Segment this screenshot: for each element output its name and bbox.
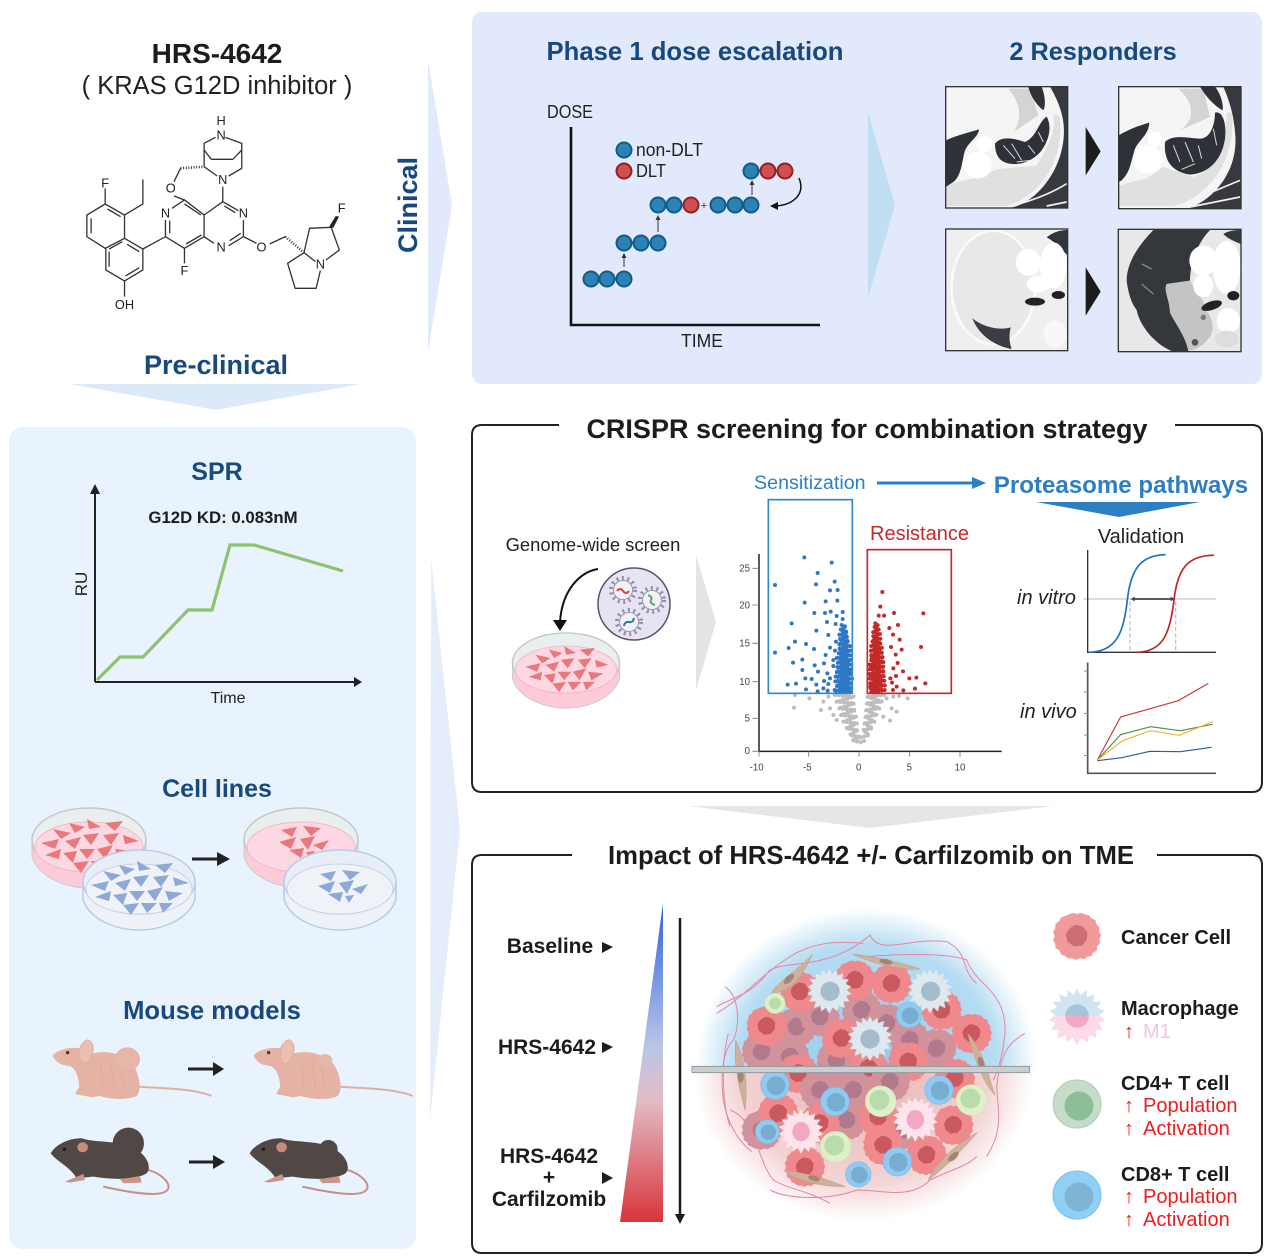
legend: CD4+ T cell: CD4+ T cell — [1121, 1073, 1229, 1095]
arrow: to proteasome — [877, 477, 986, 489]
marker: baseline — [602, 942, 613, 953]
volcano plot — [739, 500, 1002, 774]
dose escalation chart — [547, 102, 820, 351]
heading: Phase 1 dose escalation: Phase 1 dose escalation — [547, 38, 843, 66]
marker: HRS-4642 — [602, 1042, 613, 1053]
chemical structure: N — [218, 172, 227, 187]
chemical structure: OH — [115, 297, 134, 312]
volcano plot: 0 — [856, 763, 861, 774]
dose escalation chart: DOSE — [547, 102, 593, 122]
gradient wedge — [620, 903, 663, 1222]
volcano plot: 5 — [907, 763, 912, 774]
text: Sensitization: Sensitization — [754, 472, 866, 494]
chemical structure: N — [217, 127, 226, 142]
chemical structure: F — [181, 263, 188, 278]
subtitle: ( KRAS G12D inhibitor ) — [82, 72, 352, 100]
chemical structure: O — [256, 240, 266, 255]
volcano plot: 20 — [739, 600, 750, 611]
arrow: grey chevron — [696, 555, 716, 690]
volcano plot: 10 — [955, 763, 965, 774]
legend: macrophage — [1049, 988, 1239, 1045]
mice: nude, with tumour shrink — [53, 1039, 413, 1099]
SPR chart: Time — [211, 690, 246, 707]
text: Proteasome pathways: Proteasome pathways — [994, 472, 1248, 499]
tumour microenvironment illustration — [692, 908, 1037, 1222]
arrow: CT row 1 — [1086, 127, 1101, 175]
arrow: cell lines — [192, 852, 230, 866]
label: HRS-4642 + Carfilzomib: + — [543, 1166, 555, 1189]
heading: Clinical: Clinical — [393, 157, 423, 253]
label: Baseline: Baseline — [507, 935, 593, 958]
petri dishes: after treatment — [244, 808, 396, 930]
dose escalation chart: non-DLT — [636, 140, 703, 160]
arrow: clinical inner chevron — [868, 112, 895, 298]
label: HRS-4642: HRS-4642 — [498, 1036, 596, 1059]
legend: CD4+ T cell: Activation — [1143, 1118, 1230, 1140]
legend: CD4+ T cell: Population — [1143, 1095, 1238, 1117]
legend: CD4+ T cell: ↑ — [1124, 1118, 1134, 1140]
arrow: CT row 2 — [1086, 267, 1101, 316]
legend: CD8+ T cell: Population — [1143, 1186, 1238, 1208]
arrow: pre-clinical chevron — [70, 384, 361, 410]
arrow: black mice — [189, 1155, 225, 1169]
chemical structure: N — [316, 256, 325, 271]
volcano plot: 25 — [739, 564, 750, 575]
chemical structure: N — [239, 206, 248, 221]
marker: combination — [602, 1172, 613, 1184]
panel: pre-clinical background — [9, 427, 416, 1249]
CT scans row 2 — [946, 229, 1241, 352]
dose escalation chart: DLT — [636, 161, 666, 181]
SPR chart: G12D KD: 0.083nM — [148, 508, 298, 527]
petri dishes: before treatment — [32, 808, 195, 930]
arrow: proteasome chevron — [1036, 502, 1200, 517]
heading: CRISPR screening: CRISPR screening for combination strategy — [586, 414, 1148, 444]
text: Resistance: Resistance — [870, 523, 969, 545]
legend: CD4+ T cell — [1053, 1073, 1238, 1140]
SPR chart — [72, 484, 362, 707]
legend: macrophage: ↑ — [1124, 1021, 1134, 1043]
CT scan: responder 2 follow-up — [1118, 229, 1241, 352]
label: HRS-4642 + Carfilzomib — [492, 1145, 606, 1211]
heading: Mouse models: Mouse models — [123, 997, 301, 1025]
volcano plot: 0 — [745, 746, 750, 757]
text: genome-wide screen: Genome-wide screen — [506, 534, 680, 555]
chemical structure: N — [161, 206, 170, 221]
title: HRS-4642: HRS-4642 — [152, 38, 282, 69]
volcano plot: -10 — [750, 763, 764, 774]
arrow: large right chevron — [430, 558, 460, 1120]
chemical structure: H — [217, 113, 226, 128]
legend: CD8+ T cell: Activation — [1143, 1209, 1230, 1231]
arrow: nude mice — [188, 1062, 224, 1076]
arrow: treatment progression — [675, 918, 685, 1224]
legend: CD4+ T cell: ↑ — [1124, 1095, 1134, 1117]
volcano plot: 5 — [745, 714, 750, 725]
SPR chart: RU — [72, 572, 91, 596]
arrow: clinical chevron — [428, 60, 452, 352]
volcano plot: 10 — [739, 677, 750, 688]
illustration: virus and dish — [512, 568, 670, 708]
volcano plot: 15 — [739, 639, 750, 650]
label: HRS-4642 + Carfilzomib: HRS-4642 — [500, 1145, 598, 1168]
panel: clinical background — [472, 12, 1262, 384]
label: HRS-4642 + Carfilzomib: Carfilzomib — [492, 1188, 606, 1211]
CT scan: responder 2 baseline — [946, 229, 1068, 351]
legend: CD8+ T cell: ↑ — [1124, 1209, 1134, 1231]
heading: Cell lines: Cell lines — [162, 775, 272, 803]
dose escalation chart: + — [701, 200, 707, 212]
chemical structure — [87, 113, 346, 312]
heading: 2 Responders: 2 Responders — [1009, 38, 1177, 66]
legend: macrophage: Macrophage — [1121, 998, 1239, 1020]
legend: cancer cell — [1053, 913, 1231, 960]
CT scan: responder 1 baseline — [946, 87, 1068, 208]
panel: CRISPR frame — [472, 425, 1262, 792]
CT scan: responder 1 follow-up — [1119, 87, 1241, 209]
heading: Impact on TME: Impact of HRS-4642 +/- Carfilzomib on TME — [608, 842, 1134, 870]
text: Validation: Validation — [1098, 526, 1184, 548]
chemical structure: F — [338, 201, 346, 216]
legend: macrophage: M1 — [1143, 1021, 1171, 1043]
heading: SPR: SPR — [191, 458, 243, 486]
mice: black, with tumour shrink — [51, 1128, 367, 1194]
text: in vivo: in vivo — [1020, 701, 1077, 723]
chemical structure: N — [217, 240, 226, 255]
legend: CD8+ T cell: ↑ — [1124, 1186, 1134, 1208]
text: in vitro: in vitro — [1017, 587, 1076, 609]
dose escalation chart: TIME — [681, 331, 723, 351]
heading: Pre-clinical: Pre-clinical — [144, 350, 288, 380]
legend: cancer cell: Cancer Cell — [1121, 927, 1231, 949]
volcano plot: -5 — [803, 763, 812, 774]
legend: CD8+ T cell: CD8+ T cell — [1121, 1164, 1229, 1186]
panel: TME frame — [472, 855, 1262, 1253]
legend: CD8+ T cell — [1053, 1164, 1238, 1231]
arrow: CRISPR to TME chevron — [688, 806, 1053, 828]
chart: in vivo growth curves — [1084, 663, 1216, 773]
CT scans row 1 — [946, 87, 1241, 209]
chart: in vitro dose curves — [1083, 550, 1216, 652]
chemical structure: O — [166, 181, 176, 196]
chemical structure: F — [101, 175, 109, 190]
